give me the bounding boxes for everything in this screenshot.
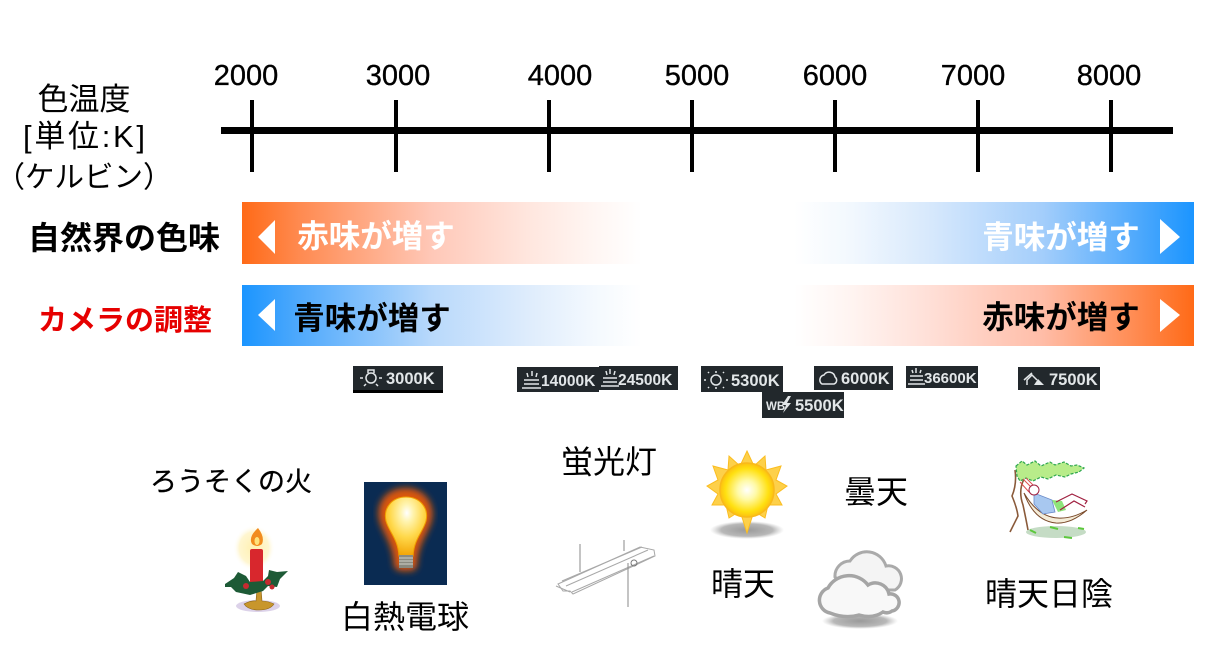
gradient bar: natural colour: 赤味が増す xyxy=(297,218,455,254)
icon: incandescent bulb xyxy=(364,482,447,585)
label: sunny shade: 晴天日陰 xyxy=(985,576,1113,612)
heading: colour temperature unit: [単位:K] xyxy=(23,119,145,154)
gradient bar: natural colour xyxy=(242,202,1194,264)
icon: person in hammock under tree xyxy=(1010,461,1087,538)
camera white balance badge: shade 7500K: 7500K xyxy=(1049,371,1098,389)
label: sunny: 晴天 xyxy=(711,566,775,602)
camera white balance badge: fluorescent 2 4500K xyxy=(599,366,678,390)
icon: cloud xyxy=(819,552,901,629)
row label: camera adjustment: カメラの調整 xyxy=(38,304,212,337)
icon: fluorescent lamp fixture xyxy=(556,540,655,607)
label: cloudy: 曇天 xyxy=(844,474,908,510)
kelvin scale axis: 7000 xyxy=(941,60,1005,92)
icon: sun xyxy=(707,451,787,539)
heading: colour temperature unit: 色温度 xyxy=(38,82,130,117)
camera white balance badge: flash 5500K: 5500K xyxy=(795,397,844,415)
label: candle flame: ろうそくの火 xyxy=(150,467,312,497)
row label: natural colour: 自然界の色味 xyxy=(28,220,220,256)
camera white balance badge: daylight 5300K xyxy=(701,366,783,392)
icon: candle xyxy=(225,525,288,612)
camera white balance badge: fluorescent 3 6600K: 36600K xyxy=(924,370,977,387)
camera white balance badge: fluorescent 1 4000K: 14000K xyxy=(541,373,596,390)
camera white balance badge: daylight 5300K: 5300K xyxy=(731,372,780,390)
kelvin scale axis: 3000 xyxy=(366,60,430,92)
gradient bar: natural colour: 青味が増す xyxy=(982,219,1140,255)
kelvin scale axis: 8000 xyxy=(1077,60,1141,92)
camera white balance badge: 3000K: 3000K xyxy=(386,370,435,388)
heading: colour temperature unit: （ケルビン） xyxy=(0,161,173,194)
kelvin scale axis xyxy=(214,60,1173,172)
label: incandescent bulb: 白熱電球 xyxy=(341,599,469,635)
kelvin scale axis: 6000 xyxy=(803,60,867,92)
gradient bar: camera adjustment xyxy=(242,285,1194,346)
kelvin scale axis: 4000 xyxy=(528,60,592,92)
camera white balance badge: 3000K xyxy=(353,366,443,393)
kelvin scale axis: 5000 xyxy=(665,60,729,92)
camera white balance badge: fluorescent 2 4500K: 24500K xyxy=(618,372,673,389)
gradient bar: camera adjustment: 青味が増す xyxy=(293,300,451,336)
camera white balance badge: flash 5500K xyxy=(762,392,844,418)
kelvin scale axis: 2000 xyxy=(214,60,278,92)
camera white balance badge: cloudy 6000K xyxy=(814,366,893,390)
camera white balance badge: fluorescent 3 6600K xyxy=(906,366,978,388)
camera white balance badge: fluorescent 1 4000K xyxy=(517,367,599,392)
camera white balance badge: cloudy 6000K: 6000K xyxy=(841,370,890,388)
gradient bar: camera adjustment: 赤味が増す xyxy=(982,299,1140,335)
heading: colour temperature unit xyxy=(0,82,173,194)
camera white balance badge: flash 5500K: WB xyxy=(766,401,785,413)
label: fluorescent lamp: 蛍光灯 xyxy=(561,444,657,480)
camera white balance badge: shade 7500K xyxy=(1018,367,1100,390)
